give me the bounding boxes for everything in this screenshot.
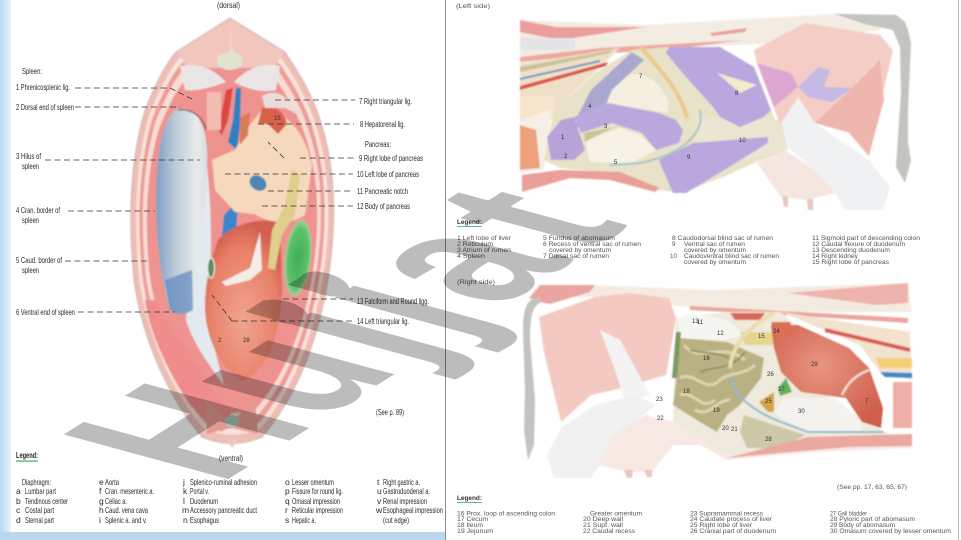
hind leg white [781,97,890,210]
legend column 3: Duodenum [190,496,218,506]
legend column 1: Diaphragm: [22,477,51,487]
legend heading upper: Legend: [457,219,482,226]
lower legend entries: 30 Omasum covered by lesser omentum [830,528,951,535]
plate numbers: 13 [692,319,699,325]
spleen labels: Spleen: [22,66,42,76]
rib on abomasum [842,370,869,395]
legend column 4: Reticular impression [292,505,343,515]
plate numbers: 22 [657,416,664,422]
lower legend entries: 23 Supramammal recess [690,510,763,518]
legend column 4: Fissure for round lig. [292,486,343,496]
liver and pancreas labels: (See p. 89) [376,407,404,417]
legend column 2: Cran. mesenteric a. [105,486,154,496]
illustration: left side of cow [520,14,896,210]
orientation labels: (ventral) [219,453,243,463]
legend column 5: t [377,477,380,487]
legend column 5: (cut edge) [383,515,409,525]
udder [757,150,835,200]
plate numbers: 3 [604,124,608,130]
upper legend entries: 1 Left lobe of liver [457,235,511,242]
rib arc [730,313,774,368]
spleen labels: spleen [22,265,39,275]
pancreatic notch vessel [247,172,269,194]
upper legend entries: 9 [672,241,676,248]
side labels: (Right side) [457,279,495,286]
lower legend entries: 20 Deep wall [583,516,623,523]
legend column 3: n [183,515,188,525]
legend column 3: j [182,477,185,487]
plate numbers: 2 [218,338,222,344]
legend column 4: Lesser omentum [292,477,334,487]
legend column 3: k [183,486,188,496]
spleen [156,109,207,314]
legend column 1 [16,477,68,525]
right plate text [456,3,951,535]
leader lines left plate [45,88,355,321]
legend column 2 [99,477,154,525]
diaphragm lower fan [145,300,232,432]
plate numbers: 15 [758,334,765,340]
liver and pancreas labels: 8 Hepatorenal lig. [360,119,405,129]
legend column 2: Celiac a. [105,496,127,506]
spleen labels: spleen [22,161,39,171]
central vessels [207,88,241,300]
legend column 2: Splenic a. and v. [105,515,147,525]
upper legend entries: covered by omentum [549,247,611,254]
liver and pancreas labels: Pancreas: [365,139,391,149]
abomasum [205,221,282,381]
lower legend entries: 19 Jejunum [457,528,493,535]
plate numbers: 18 [683,389,690,395]
side labels: (See pp. 17, 63, 65, 67) [837,484,907,491]
curved ribs [640,46,687,118]
spleen labels [16,66,75,317]
upper legend entries: covered by omentum [684,259,746,266]
teats left [782,195,813,210]
lower legend entries: Greater omentum [590,510,642,518]
legend column 1: d [16,515,21,525]
legend column 4: Omasal impression [292,496,340,506]
pylorus [740,415,805,448]
legend column 4: s [285,515,289,525]
lower legend entries: 28 Pyloric part of abomasum [830,516,915,523]
legend column 5: Renal impression [383,496,427,506]
plate numbers: 1 [561,135,565,141]
tail right [523,297,540,460]
upper legend entries: Caudoventral blind sac of rumen [684,253,780,260]
lower legend entries: 29 Body of abomasum [830,522,895,529]
abomasum large [771,325,883,428]
legend heading left: Legend: [16,450,38,460]
legend column 2: h [99,505,104,515]
spleen labels: 3 Hilus of [16,151,41,161]
legend column 1: a [16,486,21,496]
upper legend entries: 15 Right lobe of pancreas [812,259,889,266]
thoracic edge [520,110,552,172]
upper legend entries: 13 Descending duodenum [812,247,890,254]
green strip [672,332,681,378]
upper legend entries: 12 Caudal flexure of duodenum [812,241,905,248]
plate numbers: 2 [564,154,568,160]
tail left [835,14,911,183]
gall bladder [281,219,315,297]
gall bladder [778,378,792,396]
legend column 1: Lumbar part [25,486,56,496]
purple regions [547,47,852,193]
upper legend entries: 14 Right kidney [812,253,859,260]
legend column 1: c [16,505,21,515]
kidney region [730,313,765,320]
upper legend entries: 8 Caudodorsal blind sac of rumen [672,235,774,242]
upper legend entries: 7 Dorsal sac of rumen [543,253,610,260]
plate numbers: 10 [739,138,746,144]
illustration: right side of cow [529,283,912,478]
upper legend entries: Ventral sac of rumen [684,241,746,248]
legend column 4: r [285,505,288,515]
intestines [673,338,764,432]
plate numbers: 12 [717,331,724,337]
legend column 3: m [182,505,189,515]
legend column 2: g [99,496,104,506]
plate numbers: 29 [811,362,818,368]
plate numbers: 4 [588,104,592,110]
liver and pancreas labels: 7 Right triangular lig. [359,96,412,106]
side labels [456,3,907,491]
white tendon strip [600,330,650,402]
upper legend entries: 6 Recess of ventral sac of rumen [543,241,642,248]
liver and pancreas labels: 12 Body of pancreas [357,201,410,211]
legend heading lower: Legend: [457,495,482,502]
legend column 3 [182,477,257,525]
plate numbers: 28 [765,437,772,443]
upper legend entries: 10 [670,253,677,260]
plate numbers: 20 [722,426,729,432]
plate numbers: 21 [731,427,738,433]
belly wall [522,170,660,192]
omentum strip [186,115,224,385]
upper legend entries: 3 Atrium of rumen [457,247,512,254]
flank and cavity background [673,312,890,455]
lower legend entries: 27 Gall bladder [830,510,867,518]
plate numbers: 25 [765,399,772,405]
plate numbers: 27 [778,387,785,393]
upper legend entries: 11 Sigmoid part of descending colon [812,235,921,242]
liver and pancreas labels: 9 Right lobe of pancreas [359,153,423,163]
spleen labels: spleen [22,215,39,225]
spine right [781,312,912,380]
upper legend entries: 5 Fundus of abomasum [543,235,615,242]
plate numbers: 24 [773,329,780,335]
legend column 3: Accessory pancreatic duct [190,505,257,515]
watermark: Hujjat [3,166,682,499]
lower legend entries: 24 Caudate process of liver [690,516,772,523]
orientation labels [217,0,243,463]
lower legend entries [457,510,951,535]
legend column 2: e [99,477,104,487]
legend column 1: Tendinous center [25,496,68,506]
hindquarter muscle [539,293,676,422]
upper legend entries: 2 Reticulum [457,241,493,248]
spleen labels: 6 Ventral end of spleen [16,307,75,317]
liver lobe [759,392,774,412]
dorsal band and muscles [520,14,896,70]
legend column 5: Esophageal impression [383,505,443,515]
legend column 2: i [99,515,101,525]
plate numbers: 19 [713,408,720,414]
lower legend entries: 16 Prox. loop of ascending colon [457,510,556,518]
illustration: ventral view of abdominal cavity [131,18,334,448]
udder and belly [598,415,912,472]
spleen labels: 2 Dorsal end of spleen [16,102,74,112]
omasum [774,398,862,432]
cream triangle on dorsal sac [717,73,757,93]
legend column 2: Aorta [105,477,119,487]
lower legend entries: 22 Caudal recess [583,528,635,535]
legend column 4: o [285,477,290,487]
legend column 1: b [16,496,21,506]
ventral wall [727,434,912,458]
spleen labels: 4 Cran. border of [16,205,60,215]
vertebra and dorsal muscles [177,20,284,91]
orientation labels: (dorsal) [217,0,240,10]
white fold above intestines [678,315,745,340]
plate numbers: 9 [687,155,691,161]
lower legend entries: 26 Cranial part of duodenum [690,528,776,535]
plate numbers [218,74,869,443]
liver and pancreas labels: 14 Left triangular lig. [357,316,409,326]
liver and pancreas labels: 10 Left lobe of pancreas [357,169,419,179]
side labels: (Left side) [456,3,490,10]
organs background cream-olive [544,47,788,193]
legend column 2: f [99,486,102,496]
legend column 3: Esophagus [190,515,219,525]
liver and pancreas labels: 11 Pancreatic notch [357,186,408,196]
liver and pancreas labels: 13 Falciform and Round ligg. [357,296,429,306]
plate numbers: 11 [697,320,704,326]
legend column 4: q [285,496,290,506]
lower legend entries: 17 Cecum [457,516,488,523]
plate numbers: 16 [703,356,710,362]
plate numbers: 26 [767,372,774,378]
legend column 4: p [285,486,290,496]
teats right [624,470,652,478]
upper legend entries [457,235,921,266]
legend column 5: w [375,505,383,515]
ventral fold [205,398,258,448]
upper legend entries: 4 Spleen [457,253,486,260]
liver tip [258,106,287,134]
lower legend entries: 18 Ileum [457,522,483,529]
spleen labels: 5 Caud. border of [16,255,62,265]
plate numbers: 8 [735,91,739,97]
plate numbers: 23 [656,397,663,403]
legend column 3: Portal v. [190,486,209,496]
legend column 3: l [183,496,185,506]
legend heading left [16,450,38,462]
yellow tube [268,170,300,270]
legend column 5: v [377,496,382,506]
upper legend entries: covered by omentum [684,247,746,254]
plate numbers: 7 [639,74,643,80]
dorsal band [529,283,912,323]
left plate text [16,0,443,525]
plate numbers: 30 [798,409,805,415]
legend column 5: u [377,486,382,496]
liver and pancreas labels [357,96,429,417]
hind leg [547,395,656,478]
plate numbers: 7 [865,399,869,405]
hindquarter muscle [754,23,893,157]
legend column 4: Hepatic a. [292,515,316,525]
legend column 5 [375,477,443,525]
pancreas [212,110,312,222]
lower legend entries: 25 Right lobe of liver [690,522,752,529]
legend column 5: Right gastric a. [383,477,420,487]
legend column 3: Splenico-ruminal adhesion [190,477,257,487]
plate numbers: 28 [243,338,250,344]
legend column 4 [285,477,343,525]
legend column 2: Caud. vena cava [105,505,148,515]
small green oval [208,258,214,278]
caudate [771,322,795,340]
plate numbers: 15 [274,116,281,122]
legend column 5: Gastroduodenal a. [383,486,430,496]
legend column 1: Sternal part [25,515,54,525]
spine and ribs strip [520,48,620,120]
lower legend entries: 21 Supf. wall [583,522,623,529]
spleen labels: 1 Phrenicosplenic lig. [16,82,70,92]
legend column 1: Costal part [25,505,54,515]
plate numbers: 5 [614,160,618,166]
